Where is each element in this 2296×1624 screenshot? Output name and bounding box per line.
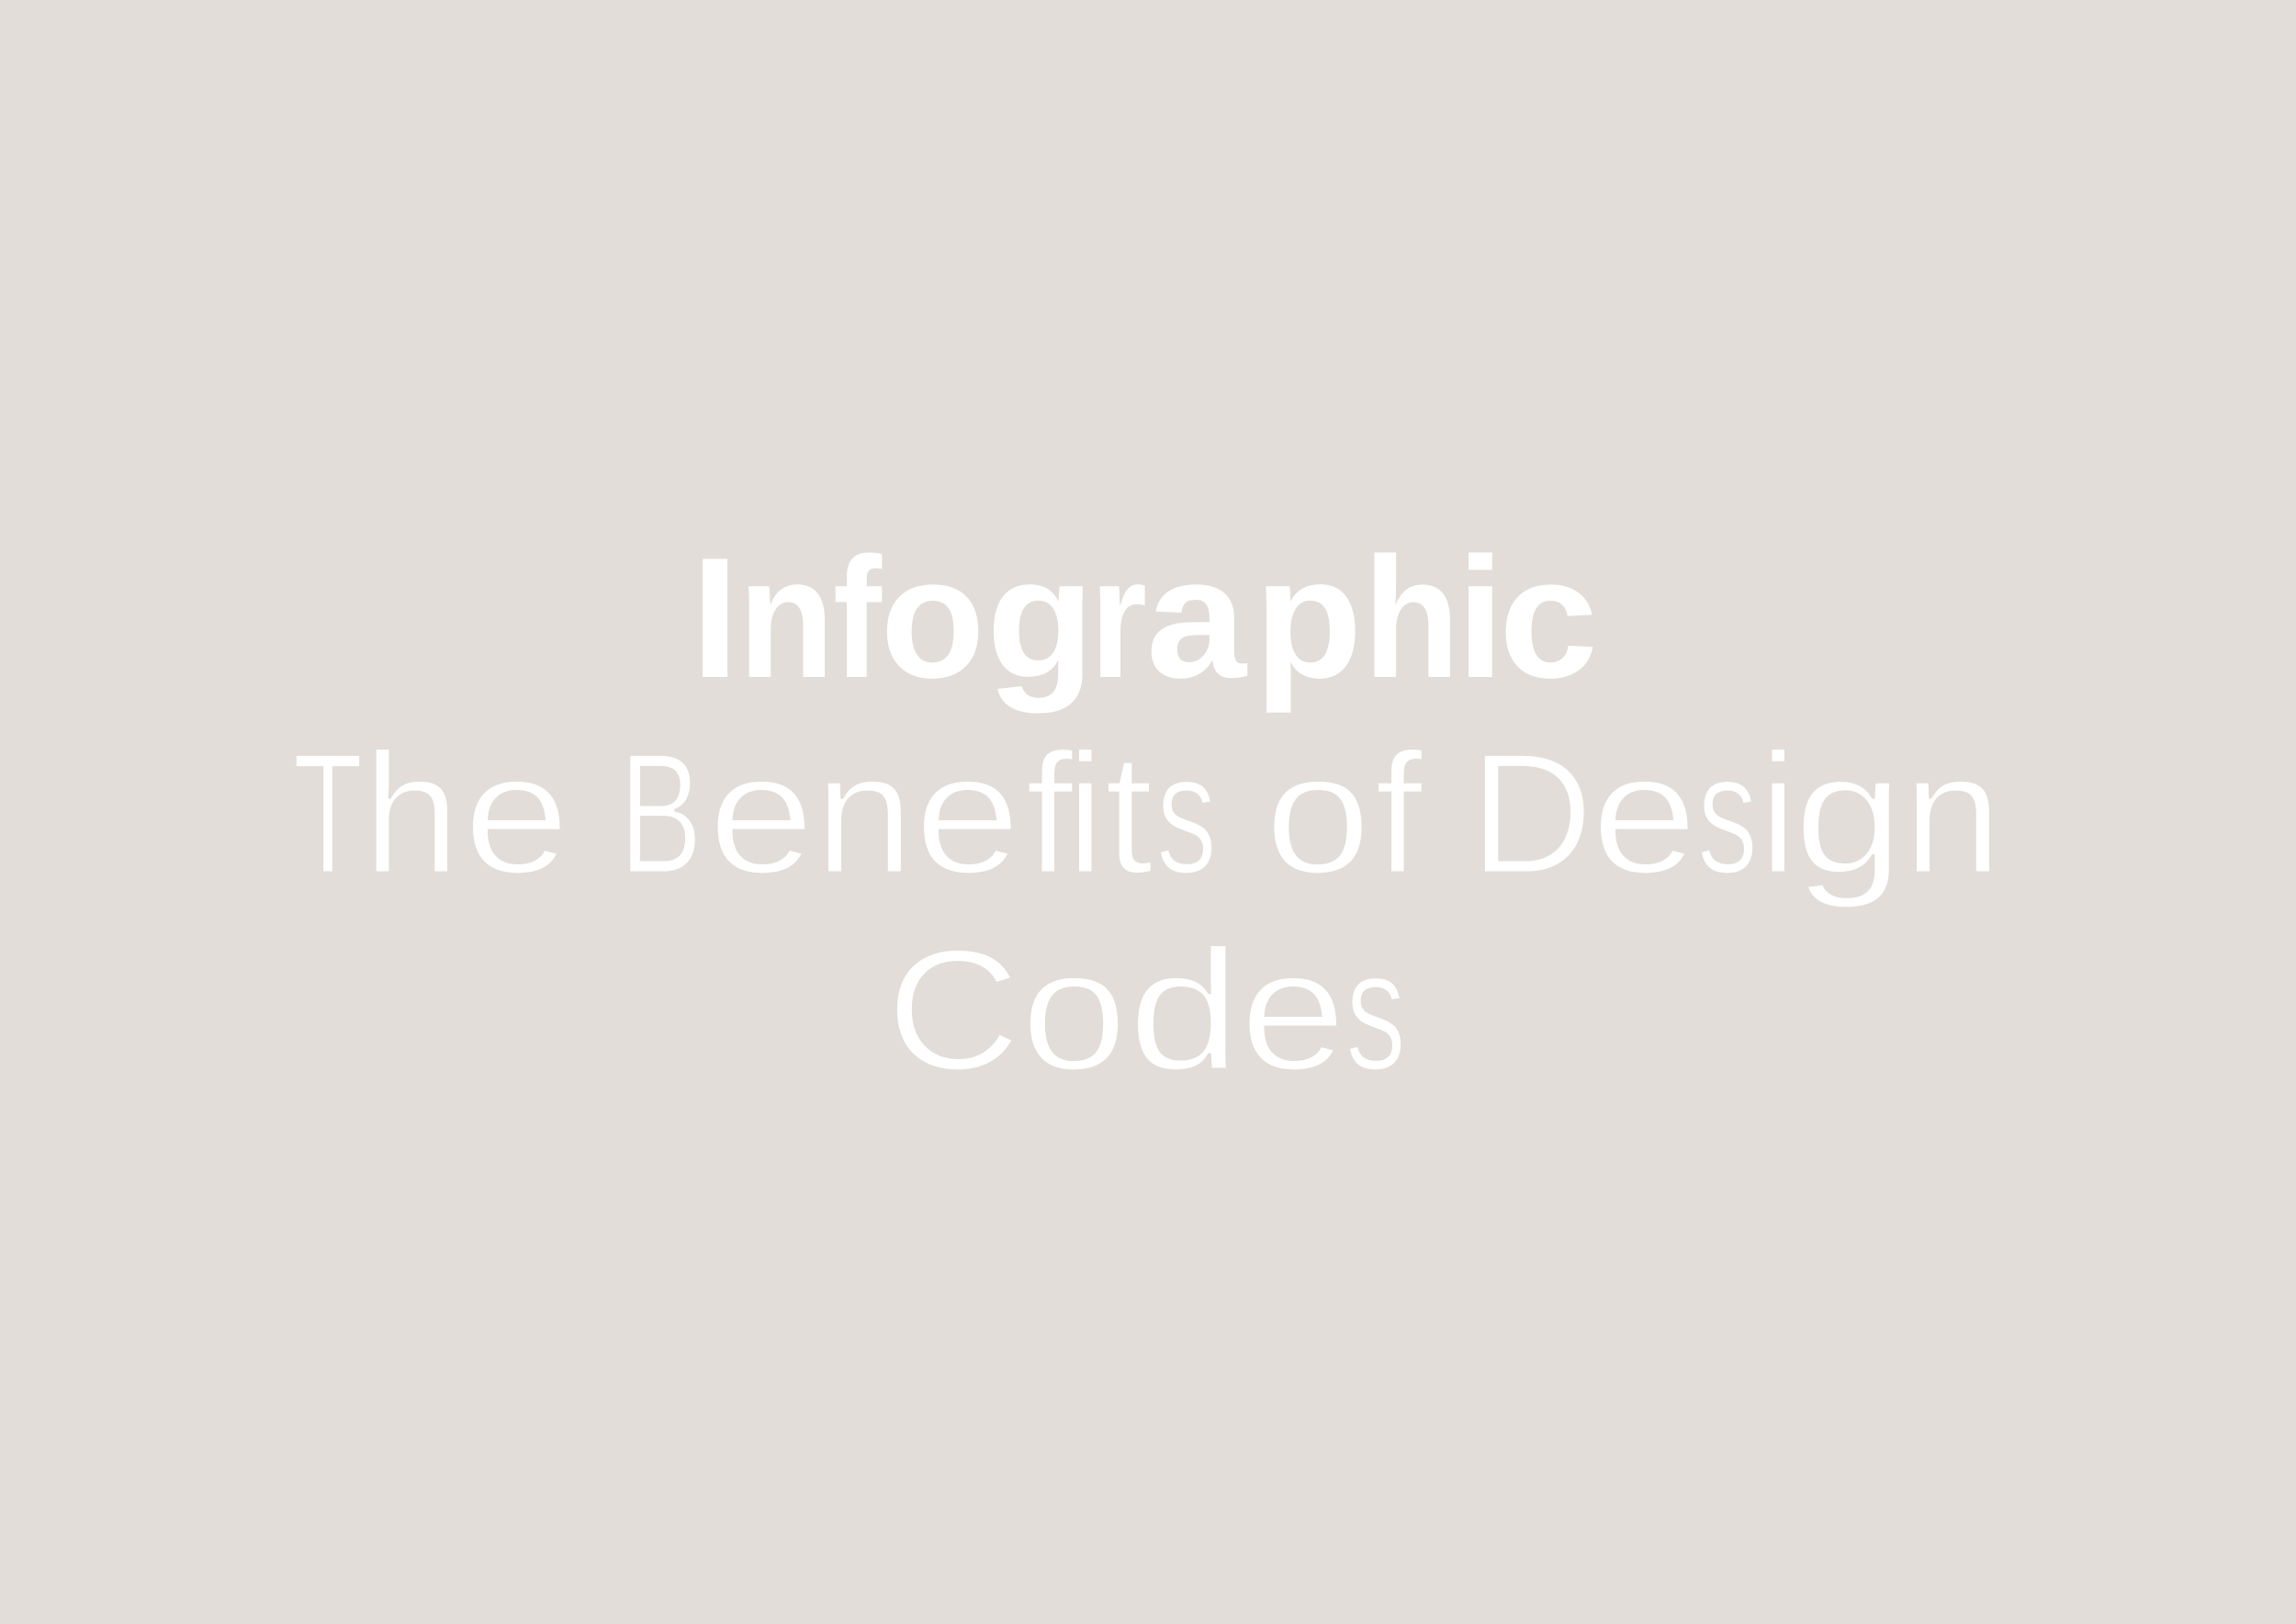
subtitle line 1: The Benefits of Design: n [1903, 717, 2002, 909]
subtitle line 1: The Benefits of Design: f [1375, 717, 1424, 909]
heading: Infographic: c [1499, 522, 1598, 714]
subtitle line 1: The Benefits of Design: e [708, 717, 815, 909]
subtitle line 1: The Benefits of Design: g [1794, 717, 1904, 909]
subtitle line 2: Codes: s [1345, 914, 1406, 1106]
subtitle line 1: The Benefits of Design [293, 717, 2002, 909]
subtitle line 1: The Benefits of Design: D [1469, 717, 1593, 909]
subtitle line 2: Codes: e [1240, 914, 1346, 1106]
subtitle line 1: The Benefits of Design: t [1105, 717, 1154, 909]
subtitle line 1: The Benefits of Design: B [619, 717, 703, 909]
heading: Infographic: g [986, 522, 1095, 714]
heading: Infographic: p [1255, 522, 1363, 714]
heading: Infographic: a [1146, 522, 1248, 714]
subtitle line 2: Codes: d [1128, 914, 1241, 1106]
subtitle line 2: Codes [886, 914, 1406, 1106]
heading: Infographic: h [1363, 522, 1460, 714]
subtitle line 1: The Benefits of Design: s [1697, 717, 1758, 909]
heading: Infographic: n [738, 522, 835, 714]
heading: Infographic: r [1090, 522, 1147, 714]
heading: Infographic: f [833, 522, 883, 714]
subtitle line 1: The Benefits of Design: i [1066, 717, 1104, 909]
heading: Infographic: i [1457, 522, 1504, 714]
subtitle line 1: The Benefits of Design: e [915, 717, 1021, 909]
heading: Infographic [692, 522, 1598, 714]
subtitle line 1: The Benefits of Design: i [1760, 717, 1797, 909]
subtitle line 1: The Benefits of Design: T [293, 717, 363, 909]
subtitle line 1: The Benefits of Design: s [1156, 717, 1217, 909]
subtitle line 2: Codes: o [1021, 914, 1128, 1106]
subtitle line 1: The Benefits of Design: o [1265, 717, 1371, 909]
subtitle line 1: The Benefits of Design: e [1591, 717, 1697, 909]
heading: Infographic: o [880, 522, 985, 714]
subtitle line 1: The Benefits of Design: n [815, 717, 914, 909]
subtitle line 2: Codes: C [886, 914, 1020, 1106]
subtitle line 1: The Benefits of Design: e [463, 717, 569, 909]
subtitle line 1: The Benefits of Design: f [1025, 717, 1075, 909]
subtitle line 1: The Benefits of Design: h [363, 717, 460, 909]
heading: Infographic: I [692, 522, 739, 714]
